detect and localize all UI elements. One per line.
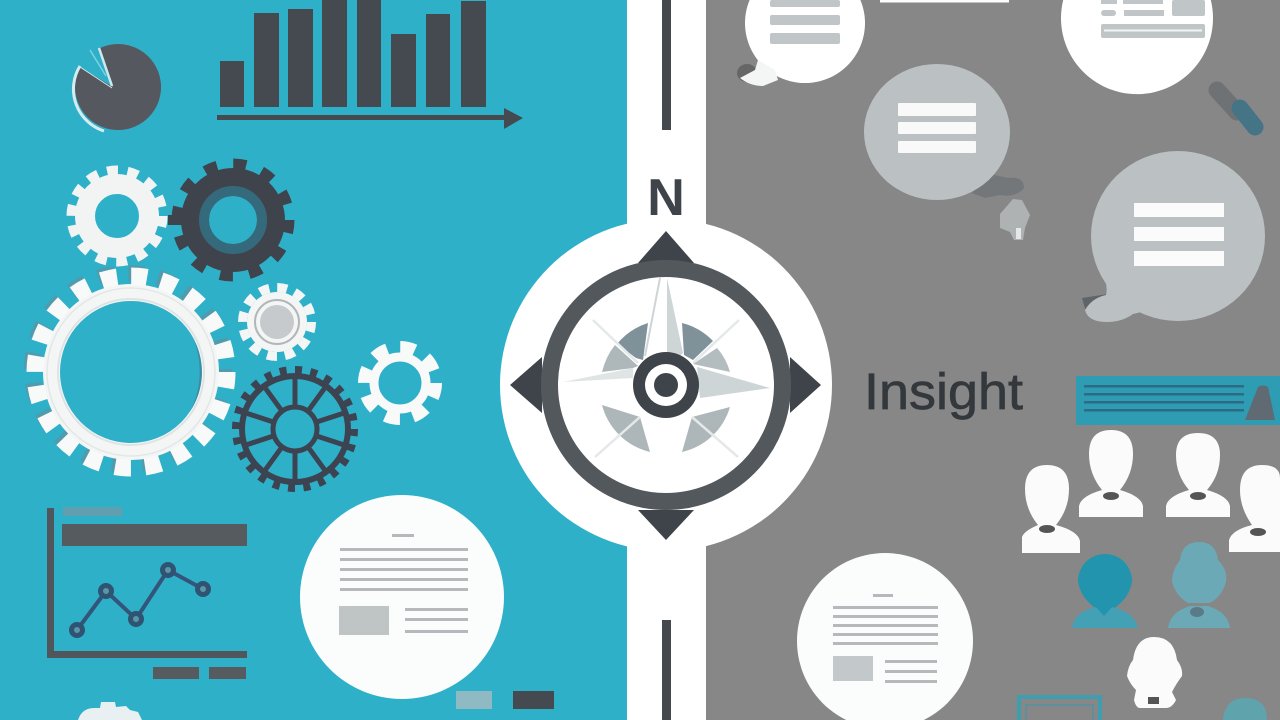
- panel: left teal background: [0, 0, 627, 720]
- person 2: [1079, 430, 1143, 517]
- person 4: [1229, 465, 1280, 552]
- person teal 1: [1072, 554, 1138, 628]
- person 1: [1022, 465, 1080, 553]
- icon: small grey centre gear: [242, 288, 312, 356]
- top white tab: [880, 0, 1009, 2]
- icon: spoked dark gear: [236, 370, 354, 488]
- panel: central white stripe: [627, 0, 706, 720]
- small bottom blocks: [456, 691, 554, 709]
- line chart panel: [47, 507, 247, 679]
- icon: dark gear: [168, 164, 289, 276]
- icon: large white gear: [32, 273, 227, 468]
- person teal 2: [1168, 542, 1230, 628]
- callout: top-right speech bubble: [1061, 0, 1213, 94]
- bar chart: top: [217, 0, 523, 129]
- icon: top-right dark tool: [1217, 90, 1255, 127]
- callout: top-left speech bubble: [737, 0, 865, 86]
- panel: right grey background: [706, 0, 1280, 720]
- road line bottom: [662, 620, 671, 720]
- icon: pie chart: [73, 44, 161, 131]
- callout: centre grey speech bubble: [864, 64, 1024, 200]
- road line top: [662, 0, 671, 130]
- icon: compass: [500, 219, 832, 551]
- icon: small figure: [1000, 199, 1030, 240]
- icon: small white gear: [71, 170, 163, 262]
- person 3: [1166, 433, 1230, 517]
- icon group: people: [1022, 430, 1280, 708]
- person 4 collar: [1250, 528, 1266, 536]
- banner: teal label: [1076, 376, 1280, 425]
- person white small: [1127, 637, 1182, 708]
- bottom-right card: [1019, 697, 1267, 720]
- callout: right large speech bubble: [1082, 151, 1265, 322]
- icon: bottom-left partial gear: [78, 702, 142, 720]
- heading: N: N: [647, 169, 685, 227]
- icon: white right gear: [364, 347, 436, 419]
- callout: left document circle: [300, 495, 504, 699]
- heading: Insight: Insight: [864, 363, 1023, 420]
- callout: bottom document circle: [797, 553, 973, 720]
